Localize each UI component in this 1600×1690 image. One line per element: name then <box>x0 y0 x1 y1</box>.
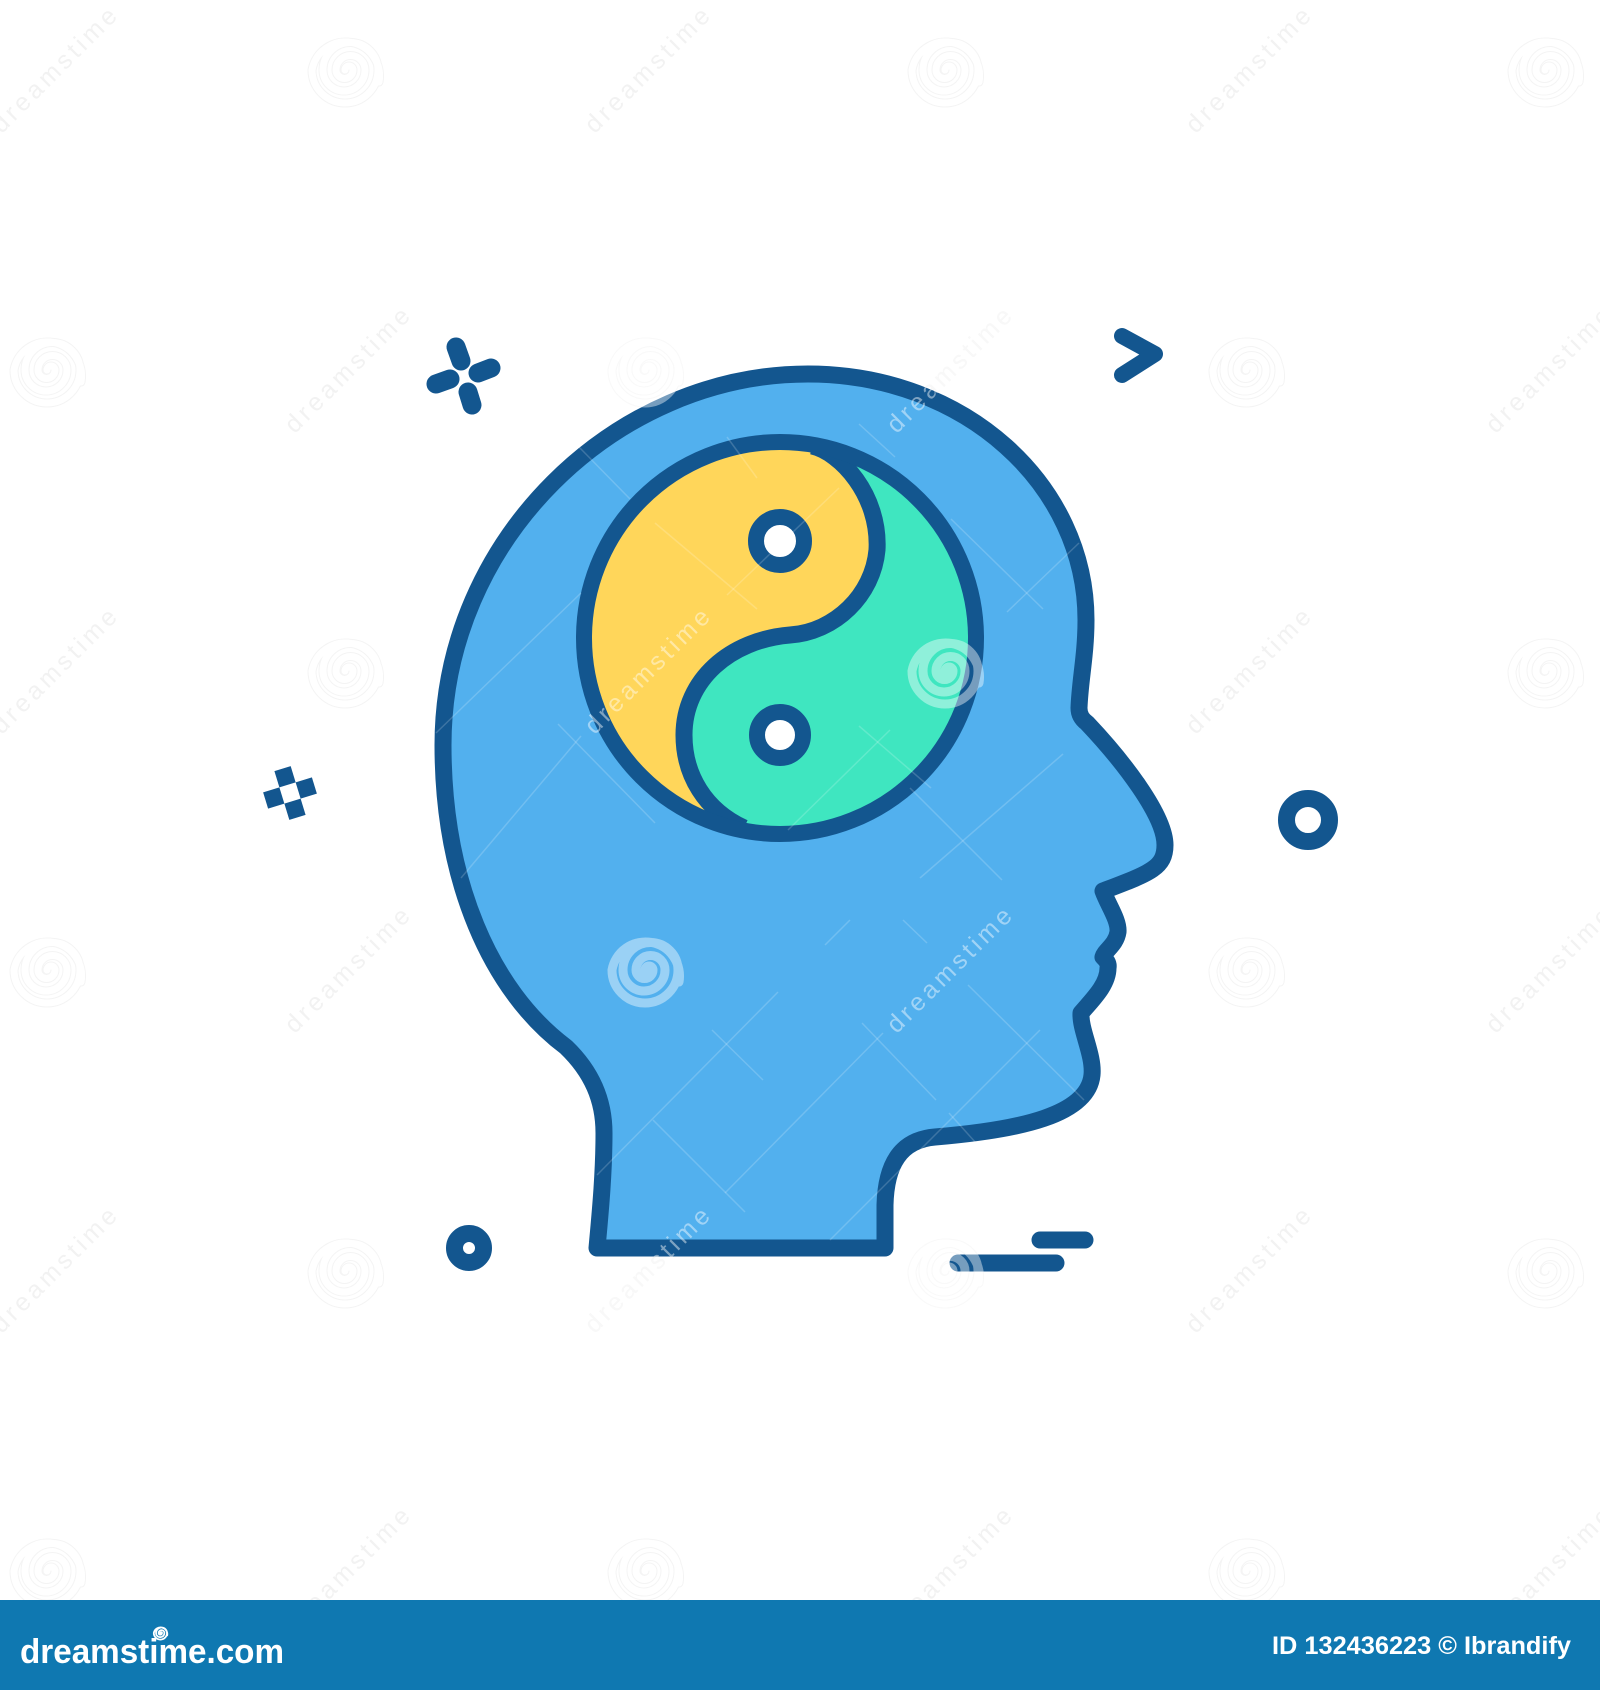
outer ring <box>584 442 976 834</box>
watermark pattern: faint diagonal text: dreamstime <box>279 902 416 1039</box>
footer image id and credit: ID 132436223 © Ibrandify <box>1272 1632 1571 1660</box>
icon: chevron <box>1122 336 1155 375</box>
watermark pattern: faint diagonal text: dreamstime <box>579 1202 716 1339</box>
bottom dot <box>757 712 803 758</box>
watermark pattern: faint diagonal text: dreamstime <box>1180 1202 1317 1339</box>
watermark overlay: text over the art: dreamstime <box>579 1202 716 1339</box>
icon: yin yang symbol <box>578 441 976 834</box>
watermark pattern: faint diagonal text: dreamstime <box>881 302 1018 439</box>
green half <box>584 442 976 834</box>
icon: speed lines <box>958 1240 1085 1263</box>
watermark overlay: text over the art <box>579 302 1018 1339</box>
watermark pattern: faint diagonal text: dreamstime <box>579 2 716 139</box>
watermark overlay: spirals over the art <box>612 342 980 1304</box>
icon: ring bottom left <box>454 1234 484 1262</box>
watermark overlay: thin crossing lines <box>436 424 1084 1240</box>
yellow half <box>578 441 877 830</box>
icon: checker diamond <box>258 761 322 825</box>
watermark pattern: faint diagonal text: dreamstime <box>279 1502 416 1639</box>
icon: four-petal sparkle <box>436 347 491 405</box>
top dot <box>756 517 804 565</box>
watermark overlay: text over the art: dreamstime <box>579 603 716 740</box>
watermark pattern: faint diagonal text: dreamstime <box>1180 2 1317 139</box>
S curve divider <box>684 446 877 828</box>
watermark pattern: faint diagonal text: dreamstime <box>881 1502 1018 1639</box>
icon: ring right <box>1286 798 1330 842</box>
watermark pattern: faint diagonal text: dreamstime <box>279 302 416 439</box>
icon: head silhouette <box>443 374 1165 1248</box>
watermark pattern: faint diagonal text: dreamstime <box>1180 603 1317 740</box>
footer banner <box>0 1600 1600 1690</box>
watermark overlay: text over the art: dreamstime <box>881 902 1018 1039</box>
footer logo text: dreamstime.com <box>20 1633 284 1671</box>
watermark overlay: text over the art: dreamstime <box>881 302 1018 439</box>
footer logo spiral <box>154 1627 167 1640</box>
